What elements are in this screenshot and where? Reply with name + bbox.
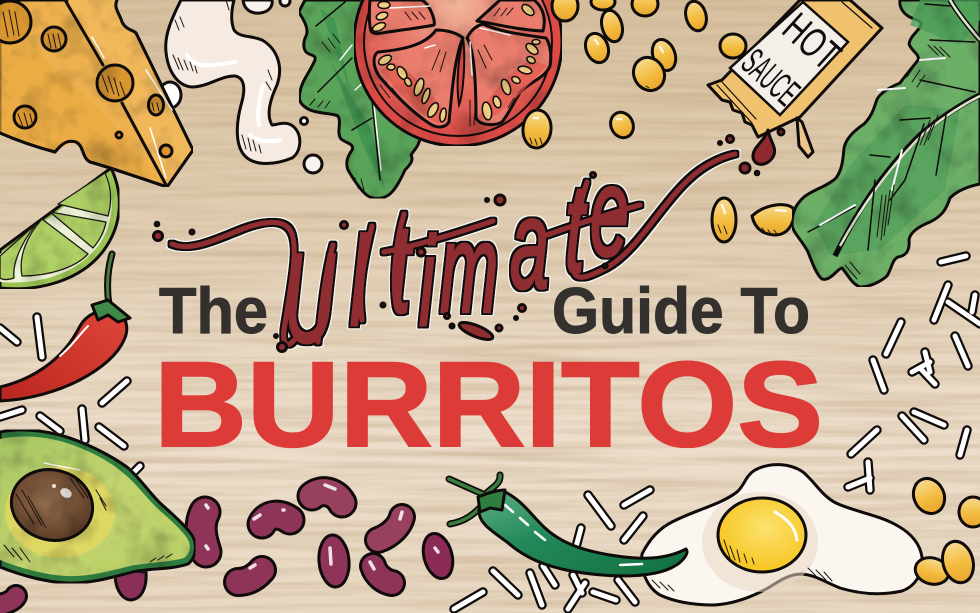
lettuce leaf right: [792, 0, 980, 287]
lettuce behind tomato: [299, 0, 450, 198]
packet label text: [733, 4, 850, 114]
rice grains center: [454, 490, 650, 609]
heading: BURRITOS: BURRITOS: [154, 336, 823, 472]
heading: Guide To: Guide To: [552, 274, 810, 347]
kidney beans: [0, 485, 457, 605]
corn kernels right: [908, 473, 980, 588]
green chili pepper: [449, 475, 687, 576]
avocado: [0, 430, 195, 583]
tomato chambers: [369, 0, 551, 127]
sauce droplets: [154, 172, 607, 352]
bean behind avocado: [115, 570, 146, 600]
tomato slice: [354, 0, 562, 146]
rice grains right: [848, 256, 980, 490]
rice grains left: [0, 317, 140, 473]
fried egg: [642, 465, 922, 605]
corn kernels top: [521, 0, 794, 242]
red chili pepper: [0, 254, 130, 401]
lime slice: [0, 168, 119, 289]
packet label text: HOT: [774, 4, 850, 79]
tomato seeds: [371, 2, 540, 122]
hot sauce packet: [708, 0, 882, 175]
cheese wedge: [0, 0, 193, 187]
cheese holes: [0, 1, 172, 157]
ketchup title word: Ultimate: [284, 142, 629, 369]
bean partly behind avocado: [201, 505, 208, 552]
heading: The: The: [159, 274, 268, 347]
packet label text: SAUCE: [733, 41, 807, 114]
ketchup title word: [172, 142, 735, 369]
cream dollop: [159, 0, 322, 173]
